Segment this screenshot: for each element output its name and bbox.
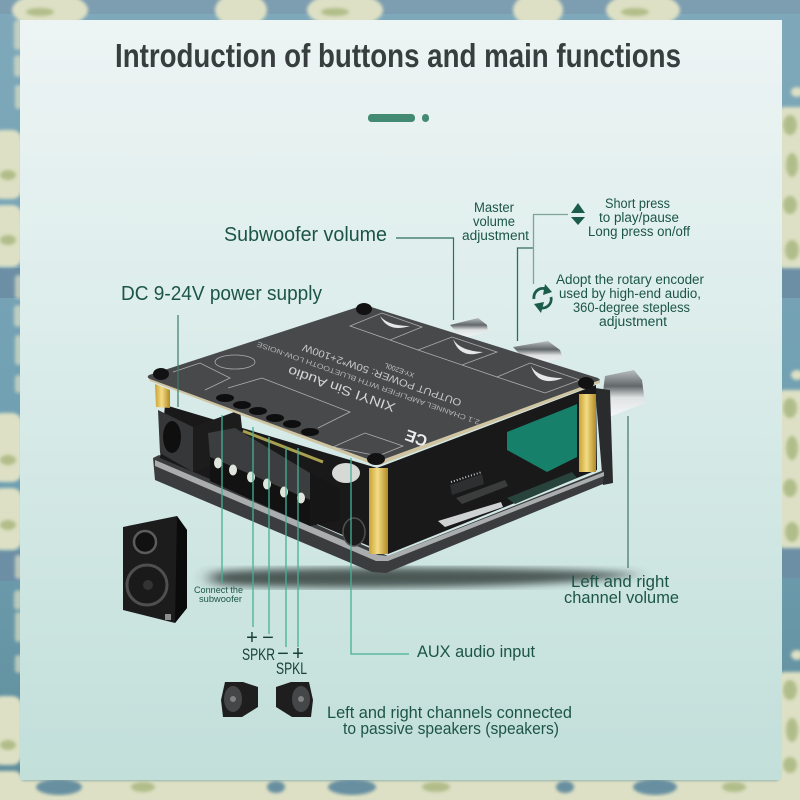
leader: left and right channel volume [627, 416, 629, 568]
icon: up and down arrows [571, 203, 585, 225]
terminal polarity labels: + [246, 627, 258, 649]
screws [153, 303, 594, 465]
leaders: speaker terminals [222, 415, 298, 647]
side panel [595, 388, 613, 485]
text: rotary encoder: Adopt the rotary encoder [556, 272, 705, 287]
leader: aux audio input [351, 458, 409, 654]
label: aux audio input: AUX audio input [417, 643, 535, 661]
terminal polarity labels: SPKR [242, 645, 275, 664]
leader: master volume [518, 248, 534, 341]
terminal polarity labels: − [277, 643, 289, 665]
shadow under board [212, 568, 640, 588]
icon: rotary refresh arrows [534, 284, 552, 313]
board label strip [438, 502, 503, 527]
text: rotary encoder: adjustment [599, 314, 667, 329]
lower plate [153, 455, 604, 573]
brass standoffs [155, 384, 596, 554]
title accent bar [368, 114, 429, 122]
text: rotary encoder: 360-degree stepless [573, 300, 690, 315]
icon: right passive speaker [276, 682, 313, 717]
text: short press [588, 196, 690, 239]
plate holes [216, 394, 319, 436]
product: amplifier board [148, 303, 645, 573]
tan strip behind terminal [243, 431, 323, 462]
label: master volume adjustment: adjustment [462, 228, 529, 243]
terminal polarity labels: + [292, 643, 304, 665]
board print: spec lines [256, 340, 481, 425]
aux jack [343, 518, 365, 546]
icon: subwoofer speaker [123, 516, 187, 623]
dc power jack [158, 410, 245, 472]
label: connect the subwoofer: Connect the [194, 585, 243, 596]
label: left and right channel volume: channel volume [564, 589, 679, 607]
board print: spec lines: 2.1 CHANNEL AMPLIFIER WITH BLUETOOTH LOW-NOISE [256, 340, 481, 425]
ic chip and circuitry [450, 472, 577, 504]
terminal polarity labels: SPKL [276, 659, 307, 678]
knob crescents on plate [380, 316, 563, 381]
top plate [148, 306, 600, 461]
text: short press: Long press on/off [588, 224, 690, 239]
label: dc power supply: DC 9-24V power supply [121, 283, 322, 305]
label: connect the subwoofer [194, 585, 243, 605]
top plate edge [148, 377, 600, 465]
text: short press: Short press [605, 196, 670, 211]
text: rotary encoder: used by high-end audio, [559, 286, 701, 301]
green capacitor block [507, 404, 577, 472]
knob: left and right channel volume [600, 370, 645, 416]
board print: spec lines: OUTPUT POWER: 50W*2+100W [301, 341, 463, 408]
icon: left passive speaker [221, 682, 258, 717]
leader: branch to controls [534, 214, 568, 284]
leader: subwoofer volume [396, 238, 454, 320]
silver capacitor [332, 463, 360, 483]
label: master volume adjustment: Master [474, 200, 514, 215]
knob: subwoofer volume [450, 318, 488, 338]
label: left and right channels: to passive speakers (speakers) [343, 720, 559, 738]
terminal polarity labels: − [262, 627, 274, 649]
label: connect the subwoofer: subwoofer [199, 594, 242, 605]
board print: spec lines: XY-E200L [383, 361, 415, 378]
pcb body [160, 385, 597, 554]
knob: master volume [513, 341, 563, 365]
terminal polarity labels [242, 627, 307, 678]
text: rotary encoder [556, 272, 705, 329]
label: master volume adjustment: volume [473, 214, 515, 229]
label: subwoofer volume: Subwoofer volume [224, 224, 387, 246]
ce mark: CE [403, 425, 430, 449]
label: left and right channels [327, 704, 572, 738]
label: master volume adjustment [462, 200, 529, 243]
label: left and right channel volume [564, 573, 679, 607]
title: Introduction of buttons and main functions [115, 38, 681, 75]
terminal block [208, 428, 340, 526]
top plate printed markings [173, 313, 580, 456]
text: short press: to play/pause [599, 210, 679, 225]
leader: dc power supply [177, 315, 179, 407]
label: left and right channel volume: Left and right [571, 573, 669, 591]
board print: product name: XINYI Sin Audio [286, 363, 397, 415]
label: left and right channels: Left and right channels connected [327, 704, 572, 722]
